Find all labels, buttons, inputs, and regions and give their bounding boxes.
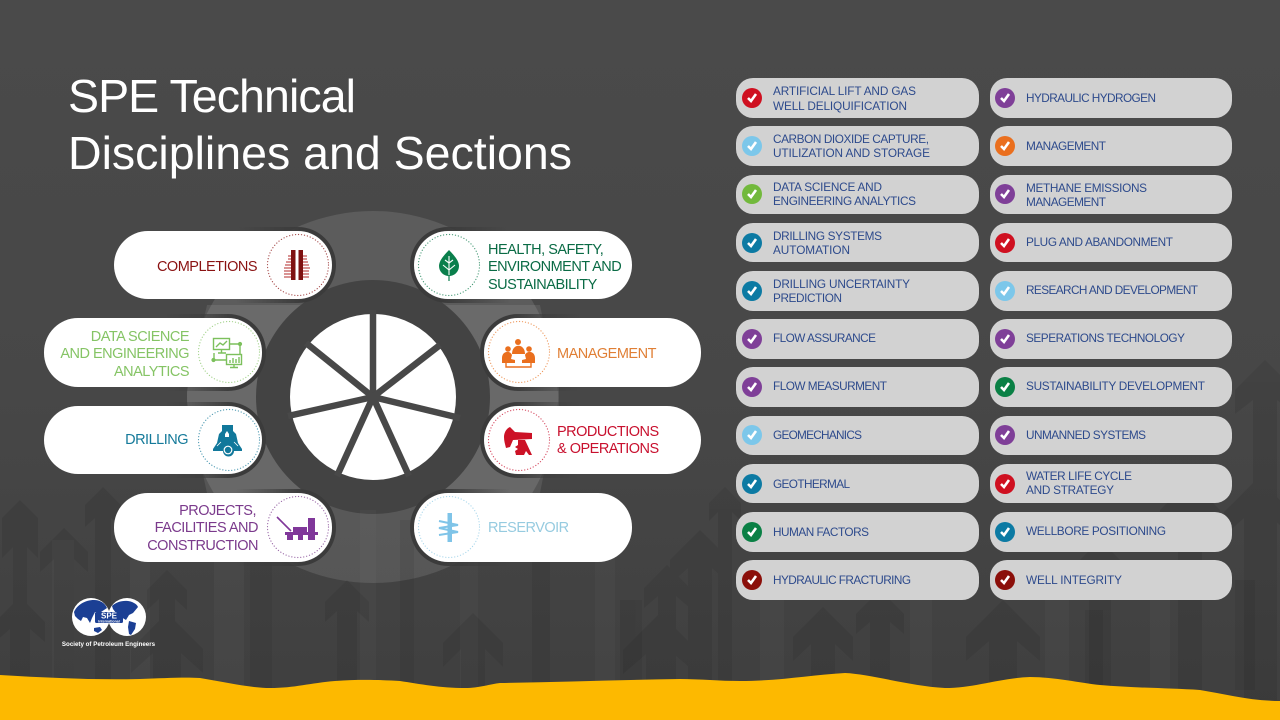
item: well integrity <box>990 560 1232 600</box>
pill: management: MANAGEMENT <box>557 346 657 362</box>
item: plug and abandonment: PLUG AND ABANDONMENT <box>1026 235 1173 249</box>
item: carbon dioxide: CARBON DIOXIDE CAPTURE, <box>773 132 929 146</box>
item: water life cycle: AND STRATEGY <box>1026 483 1114 497</box>
pill: projects, facilities and construction: FACILITIES AND <box>155 520 258 536</box>
item: carbon dioxide: UTILIZATION AND STORAGE <box>773 146 930 160</box>
item: unmanned systems: UNMANNED SYSTEMS <box>1026 428 1146 442</box>
pill: reservoir: RESERVOIR <box>488 520 569 536</box>
item: unmanned systems <box>990 416 1232 455</box>
central emblem backdrop <box>187 211 559 583</box>
pill: projects, facilities and construction: CONSTRUCTION <box>147 538 258 554</box>
logo: SPE: Society of Petroleum Engineers <box>62 641 156 648</box>
pill: completions <box>114 227 336 303</box>
item: research and development <box>990 271 1232 311</box>
item: flow assurance: FLOW ASSURANCE <box>773 331 876 345</box>
item: seperations technology <box>990 319 1232 359</box>
logo: SPE: SPE <box>101 612 118 620</box>
icon: analytics monitors <box>212 338 242 368</box>
item: human factors: HUMAN FACTORS <box>773 525 869 539</box>
icon: offshore platform <box>277 517 318 540</box>
item: geomechanics <box>736 416 979 455</box>
item: hydraulic fracturing <box>736 560 979 600</box>
item: methane emissions <box>990 175 1232 214</box>
item: wellbore positioning <box>990 512 1232 552</box>
pill: productions and operations: PRODUCTIONS <box>557 424 659 440</box>
item: drilling uncertainty <box>736 271 979 311</box>
icon: reservoir <box>439 513 458 542</box>
item: research and development: RESEARCH AND DEVELOPMENT <box>1026 283 1198 297</box>
pill: health, safety, environment and sustainability: HEALTH, SAFETY, <box>488 242 603 258</box>
item: management: MANAGEMENT <box>1026 139 1106 153</box>
item: wellbore positioning: WELLBORE POSITIONING <box>1026 524 1166 538</box>
pie wheel <box>288 310 460 480</box>
pill: data science and engineering analytics: AND ENGINEERING <box>60 346 189 362</box>
title: SPE Technical <box>68 70 356 122</box>
item: geothermal <box>736 464 979 503</box>
item: water life cycle: WATER LIFE CYCLE <box>1026 469 1132 483</box>
item: carbon dioxide <box>736 126 979 166</box>
pill: health, safety, environment and sustainability <box>410 227 632 303</box>
icon: leaf <box>439 250 459 281</box>
item: hydraulic fracturing: HYDRAULIC FRACTURING <box>773 573 911 587</box>
title <box>68 70 572 179</box>
item: hydraulic hydrogen: HYDRAULIC HYDROGEN <box>1026 91 1156 105</box>
item: methane emissions: METHANE EMISSIONS <box>1026 181 1147 195</box>
item: flow assurance <box>736 319 979 359</box>
pill: productions and operations: & OPERATIONS <box>557 441 659 457</box>
pill: projects, facilities and construction: PROJECTS, <box>179 503 256 519</box>
item: human factors <box>736 512 979 552</box>
icon: meeting <box>502 339 535 367</box>
item: data science: DATA SCIENCE AND <box>773 180 882 194</box>
pill: reservoir <box>410 489 632 566</box>
pill: drilling <box>44 402 266 478</box>
item: flow measurment <box>736 367 979 407</box>
item: drilling systems: AUTOMATION <box>773 243 850 257</box>
item: geomechanics: GEOMECHANICS <box>773 428 862 442</box>
logo: SPE <box>62 598 156 648</box>
item: artificial lift: WELL DELIQUIFICATION <box>773 99 907 113</box>
item: water life cycle <box>990 464 1232 503</box>
pill: projects, facilities and construction <box>114 489 336 566</box>
item: sustainability development: SUSTAINABILITY DEVELOPMENT <box>1026 379 1205 393</box>
item: geothermal: GEOTHERMAL <box>773 477 850 491</box>
item: methane emissions: MANAGEMENT <box>1026 195 1106 209</box>
pill: data science and engineering analytics: ANALYTICS <box>114 364 189 380</box>
pill: health, safety, environment and sustainability: ENVIRONMENT AND <box>488 259 621 275</box>
item: drilling systems <box>736 223 979 262</box>
pill: completions: COMPLETIONS <box>157 259 257 275</box>
item: data science: ENGINEERING ANALYTICS <box>773 194 916 208</box>
list: right column <box>990 78 1232 600</box>
list: left column <box>736 78 979 600</box>
background arrow pattern <box>0 360 1280 700</box>
item: plug and abandonment <box>990 223 1232 262</box>
pill: drilling: DRILLING <box>125 432 188 448</box>
icon: completions <box>284 250 310 280</box>
item: sustainability development <box>990 367 1232 407</box>
item: drilling uncertainty: DRILLING UNCERTAINTY <box>773 277 910 291</box>
pill: data science and engineering analytics: DATA SCIENCE <box>91 329 190 345</box>
item: seperations technology: SEPERATIONS TECHNOLOGY <box>1026 331 1185 345</box>
pill: management <box>480 314 701 391</box>
bottom wave band <box>0 673 1280 720</box>
pill: productions and operations <box>480 402 701 478</box>
pill: data science and engineering analytics <box>44 314 266 391</box>
item: drilling systems: DRILLING SYSTEMS <box>773 229 882 243</box>
item: artificial lift <box>736 78 979 118</box>
item: hydraulic hydrogen <box>990 78 1232 118</box>
title: Disciplines and Sections <box>68 127 572 179</box>
item: data science <box>736 175 979 214</box>
item: artificial lift: ARTIFICIAL LIFT AND GAS <box>773 84 916 98</box>
icon: pumpjack <box>504 427 532 455</box>
item: flow measurment: FLOW MEASURMENT <box>773 379 887 393</box>
pill: health, safety, environment and sustainability: SUSTAINABILITY <box>488 277 598 293</box>
item: well integrity: WELL INTEGRITY <box>1026 573 1122 587</box>
item: drilling uncertainty: PREDICTION <box>773 291 842 305</box>
logo: SPE: International <box>98 620 120 624</box>
item: management <box>990 126 1232 166</box>
icon: drill bit <box>213 425 242 456</box>
